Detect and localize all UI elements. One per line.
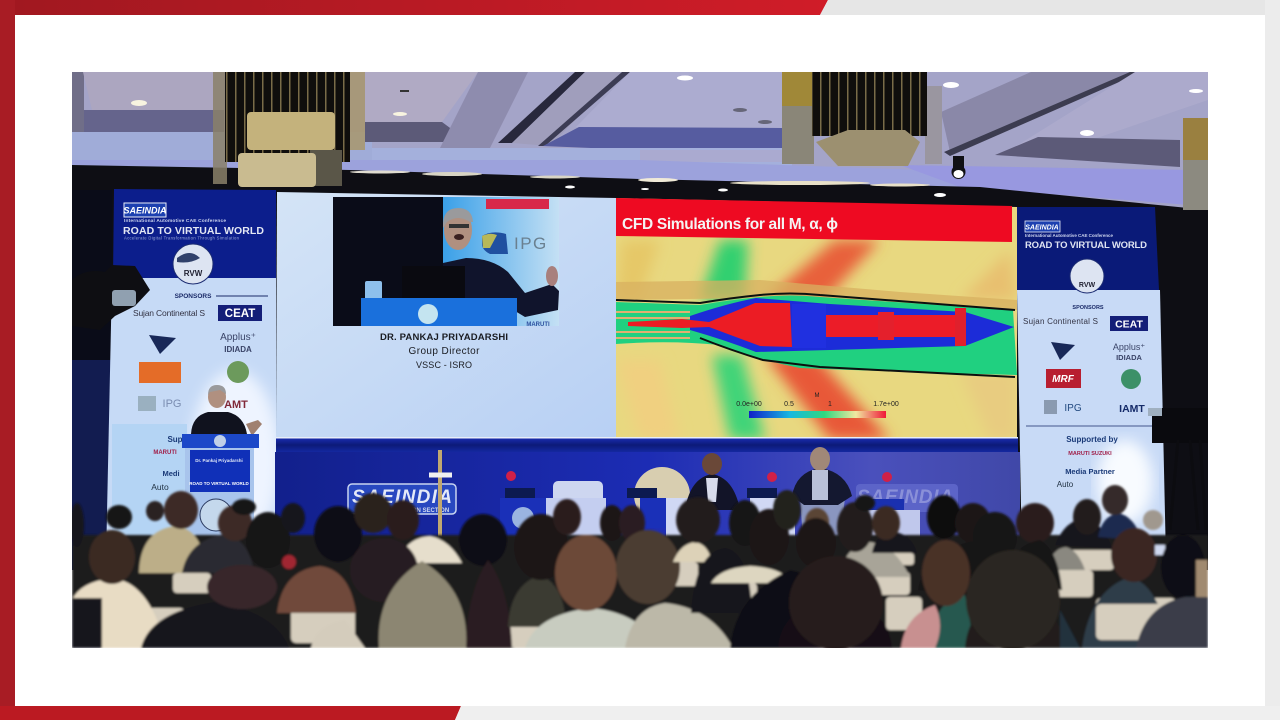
right banner: IAMT	[1119, 403, 1145, 415]
slide right: CFD simulation: 1	[828, 401, 832, 408]
left banner: IDIADA	[224, 345, 252, 354]
stage backdrop: WESTERN SECTION	[391, 508, 449, 514]
slide left: speaker video: Group Director	[408, 346, 480, 357]
slide right: CFD simulation: M	[814, 393, 820, 399]
slide right: CFD simulation	[616, 198, 1017, 440]
right banner: SPONSORS	[1072, 305, 1104, 311]
left banner: ROAD TO VIRTUAL WORLD	[123, 225, 264, 237]
left banner: International Automotive CAE Conference	[124, 218, 226, 224]
stage backdrop	[275, 437, 1020, 537]
slide left: speaker video: MARUTI	[526, 322, 550, 328]
left banner: MARUTI	[153, 450, 177, 456]
left banner: IPG	[163, 398, 181, 410]
left banner: Sujan Continental S	[133, 308, 205, 318]
dark wall and soffit	[72, 165, 1208, 570]
slide left: speaker video: IPG	[514, 234, 548, 253]
cameras	[111, 265, 1164, 443]
left banner	[106, 189, 280, 560]
chandeliers	[213, 72, 1208, 210]
speaker at podium	[182, 385, 262, 548]
left banner: SAEINDIA	[123, 206, 167, 216]
right banner: SAEINDIA	[1025, 224, 1059, 232]
right banner: Sujan Continental S	[1023, 317, 1098, 326]
spotlight	[952, 156, 966, 179]
left banner: CEAT	[225, 308, 255, 320]
slide right: CFD simulation: 0.0e+00	[736, 401, 762, 408]
left banner: Sup	[167, 435, 183, 444]
left banner: Accelerate Digital Transformation Through Simulation	[124, 236, 240, 240]
stage backdrop: SAEINDIA	[352, 487, 452, 508]
right banner: RVW	[1079, 282, 1095, 289]
panellists	[685, 447, 852, 540]
main screen	[276, 192, 1017, 440]
photo	[70, 72, 1208, 650]
left banner: Applus⁺	[220, 332, 256, 343]
slide left: speaker video	[276, 192, 616, 438]
right banner: IPG	[1064, 403, 1082, 414]
right banner: IDIADA	[1116, 353, 1142, 362]
slide left: speaker video: DR. PANKAJ PRIYADARSHI	[380, 332, 508, 343]
speaker at podium: ROAD TO VIRTUAL WORLD	[189, 481, 250, 486]
chairs	[119, 550, 1176, 648]
right banner: Applus⁺	[1113, 342, 1145, 352]
left banner: Auto	[151, 482, 169, 492]
right banner: International Automotive CAE Conference	[1025, 233, 1113, 238]
slide right: CFD simulation: 0.5	[784, 401, 794, 408]
right banner	[1013, 207, 1166, 560]
stage backdrop: SAEINDIA	[857, 487, 953, 508]
left banner: RVW	[184, 269, 203, 278]
right banner: Auto	[1057, 480, 1074, 489]
speaker at podium: Dr. Pankaj Priyadarshi	[195, 458, 243, 463]
right banner: Supported by	[1066, 435, 1118, 444]
left banner: SPONSORS	[175, 293, 212, 300]
left banner: Medi	[162, 469, 180, 478]
right banner: MRF	[1052, 374, 1075, 385]
slide right: CFD simulation: 1.7e+00	[873, 401, 899, 408]
right banner: Media Partner	[1065, 467, 1115, 476]
right banner: MARUTI SUZUKI	[1068, 451, 1112, 457]
slide left: speaker video: VSSC - ISRO	[416, 360, 472, 370]
ceiling	[72, 72, 1208, 212]
slide right: CFD simulation: CFD Simulations for all M, α, ϕ	[622, 216, 838, 233]
left banner: AMT	[224, 399, 248, 411]
audience	[70, 485, 1208, 650]
right banner: CEAT	[1115, 318, 1143, 330]
right banner: ROAD TO VIRTUAL WORLD	[1025, 240, 1147, 251]
